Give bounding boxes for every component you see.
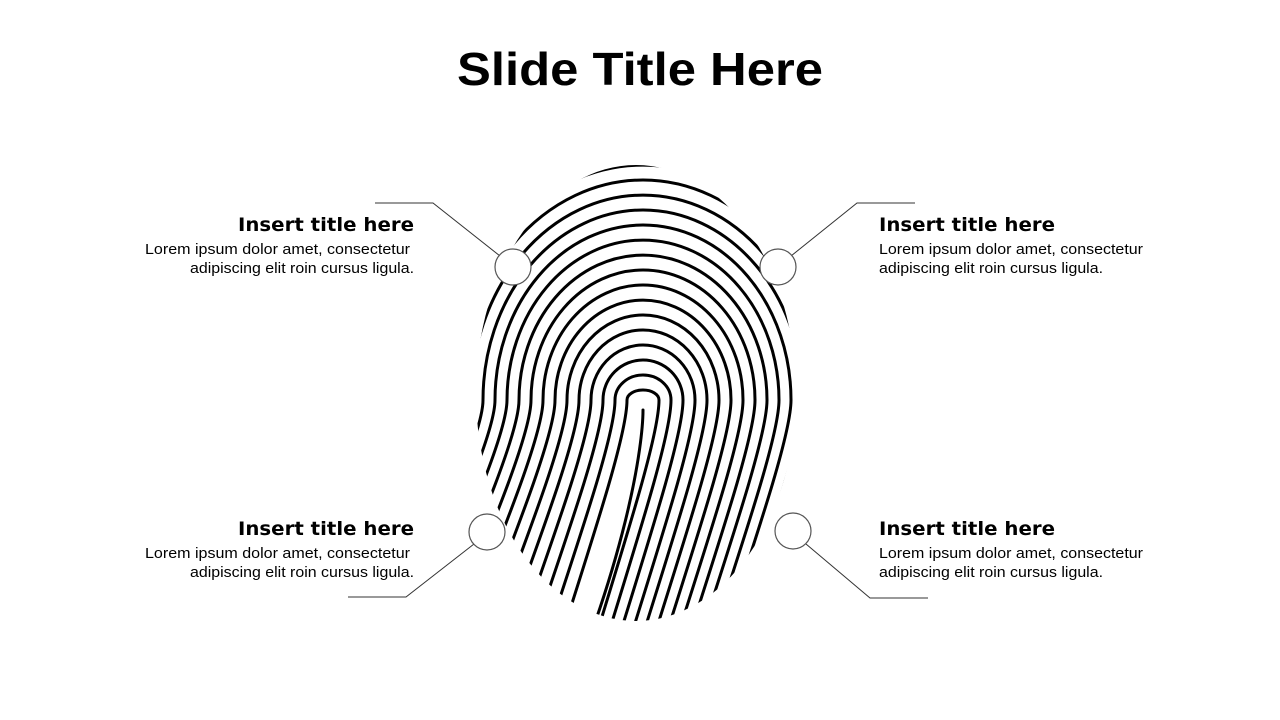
callout: top right: Lorem ipsum dolor amet, consectetur	[879, 241, 1143, 258]
callout: top right	[760, 203, 1143, 285]
callout: bottom left: Insert title here	[238, 518, 414, 540]
callout: bottom left: Lorem ipsum dolor amet, consectetur	[145, 545, 410, 562]
callout: top right: Insert title here	[879, 214, 1055, 236]
title: Slide Title Here	[457, 43, 823, 95]
fingerprint	[478, 165, 792, 621]
callout: bottom right	[775, 513, 1143, 598]
callout: bottom right: adipiscing elit roin cursus ligula.	[879, 564, 1103, 581]
callout: bottom right: Lorem ipsum dolor amet, consectetur	[879, 545, 1143, 562]
callout: top left	[145, 203, 531, 285]
callout: top left: Lorem ipsum dolor amet, consectetur	[145, 241, 410, 258]
callout: top left: Insert title here	[238, 214, 414, 236]
callout: bottom left: adipiscing elit roin cursus ligula.	[190, 564, 414, 581]
callout: top left: adipiscing elit roin cursus ligula.	[190, 260, 414, 277]
callout: bottom left	[145, 514, 505, 597]
callout: bottom right: Insert title here	[879, 518, 1055, 540]
callout: top right: adipiscing elit roin cursus ligula.	[879, 260, 1103, 277]
